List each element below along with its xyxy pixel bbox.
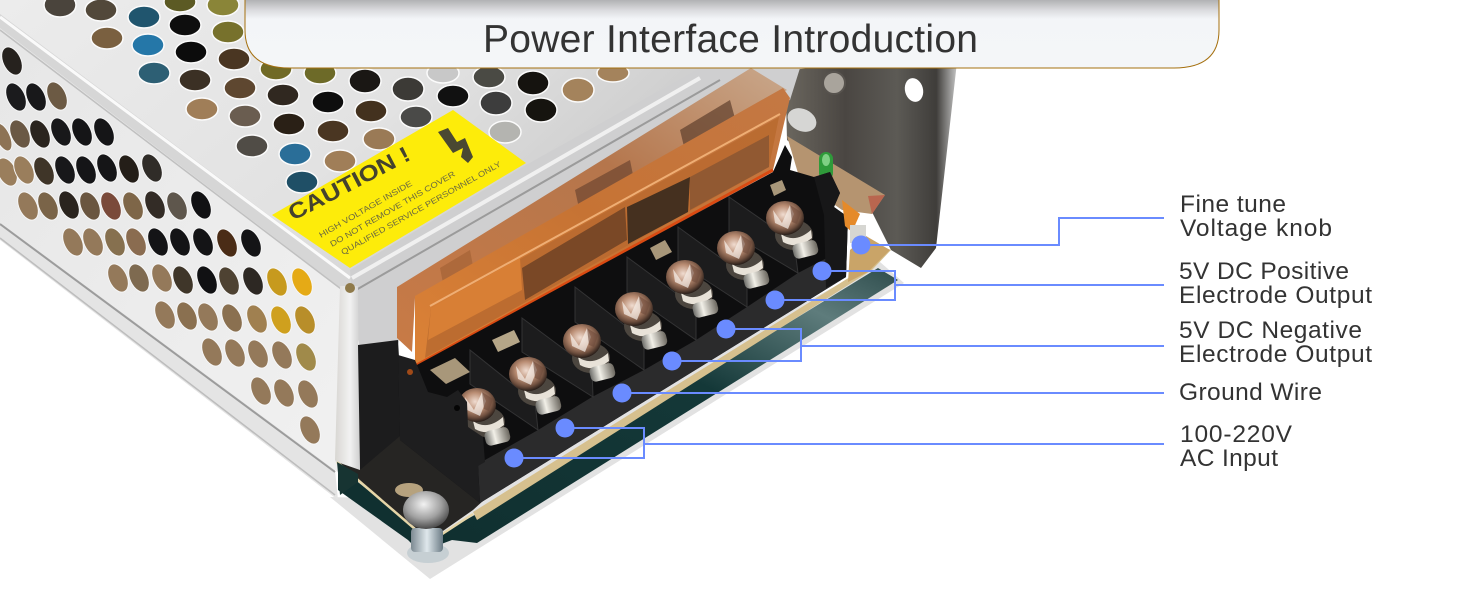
label: 100-220V: 100-220V (1180, 421, 1293, 448)
label: 5V DC negative: 5V DC Negative (1179, 317, 1362, 344)
label: electrode output negative: Electrode Output (1179, 341, 1372, 368)
mounting foot and screw (337, 436, 484, 563)
callout marker dots (504, 236, 870, 468)
yellow caution sticker (272, 110, 526, 268)
callout leader lines (514, 218, 1164, 458)
side ventilation slots (0, 44, 324, 447)
leader: 5V positive (775, 271, 1164, 300)
right terminal post and adjustment knob (814, 172, 866, 288)
label: electrode output positive: Electrode Output (1179, 282, 1372, 309)
top ventilation holes (44, 0, 629, 193)
power supply photo (0, 0, 957, 579)
black terminal block (398, 145, 848, 503)
icon: lightning bolt (438, 128, 473, 163)
label: fine tune voltage knob: Fine tune (1180, 191, 1286, 218)
yellow caution sticker: HIGH VOLTAGE INSIDE (318, 179, 414, 240)
title banner (245, 0, 1219, 68)
rear mounting bracket (784, 62, 957, 268)
title: Power Interface Introduction (483, 18, 978, 61)
label: voltage knob line: Voltage knob (1180, 215, 1332, 242)
yellow caution sticker: DO NOT REMOVE THIS COVER (328, 169, 457, 249)
orange terminal cover (397, 68, 790, 366)
label: 5V DC positive: 5V DC Positive (1179, 258, 1349, 285)
label: ground wire: Ground Wire (1179, 379, 1322, 406)
terminal screws (458, 201, 819, 447)
left terminal end cap (398, 355, 485, 503)
yellow caution sticker: QUALIFIED SERVICE PERSONNEL ONLY (340, 159, 503, 257)
label: AC input: AC Input (1180, 445, 1278, 472)
terminal partitions (470, 197, 798, 430)
bottom green circuit plate (330, 236, 904, 579)
leader: voltage knob (861, 218, 1164, 245)
callout labels (1179, 191, 1372, 472)
dark terminal back column (358, 340, 410, 470)
top perforated panel (0, 0, 810, 292)
front silver edge (335, 68, 800, 480)
leader: ground (622, 392, 1164, 394)
yellow caution sticker: CAUTION ! (284, 141, 414, 225)
leader: 5V negative (672, 329, 1164, 361)
side perforated panel (0, 0, 358, 500)
leader: AC input (514, 428, 1164, 458)
